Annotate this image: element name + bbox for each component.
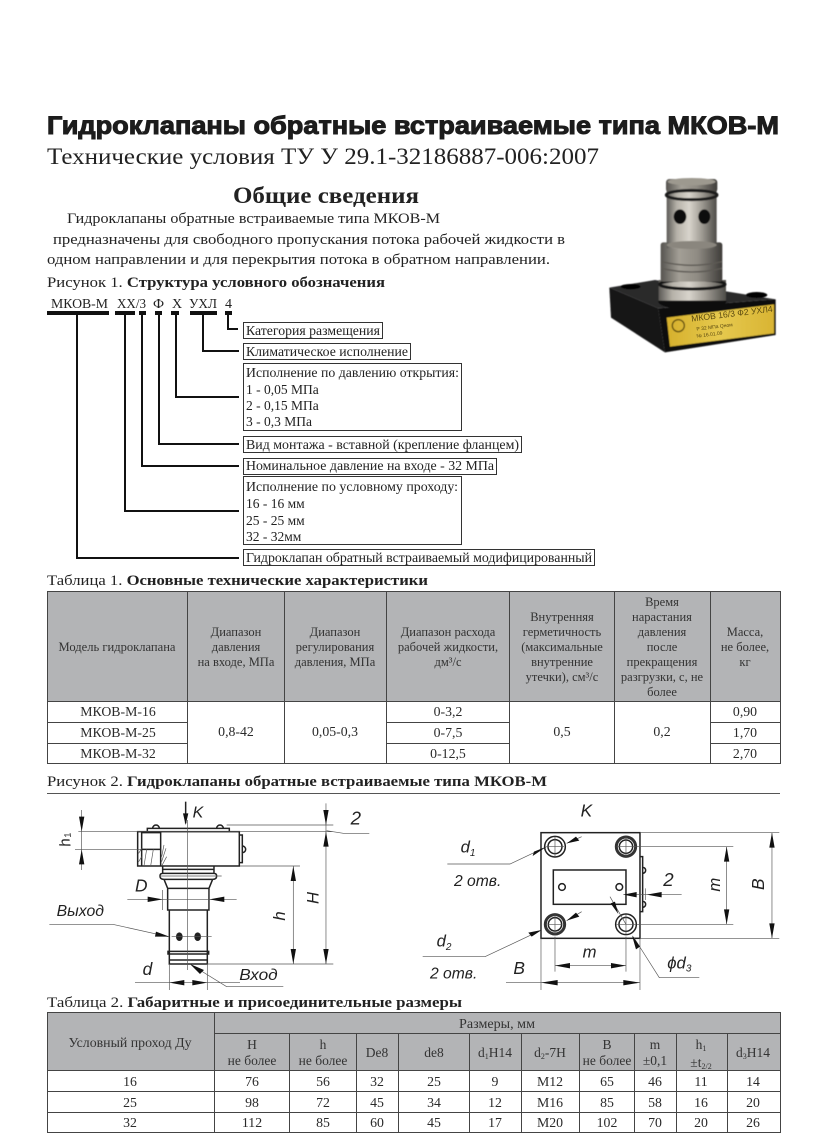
table 1 header text: утечки), см³/с (526, 670, 599, 684)
table 2 header text: Размеры, мм (459, 1016, 535, 1031)
table 1 values (80, 704, 757, 761)
table 1: main specifications (47, 591, 780, 764)
table 1 caption: Таблица 1. Основные технические характеристики (47, 573, 428, 589)
table 2 header text: Условный проход Ду (68, 1035, 192, 1050)
callout: nominal bore: 32 - 32мм (246, 529, 302, 544)
table 2 header text: 1 (485, 1052, 489, 1061)
table 2 row 32: 102 (597, 1115, 617, 1130)
drawing labels: h (56, 837, 75, 848)
drawing labels: H (303, 891, 322, 904)
table 1 header text: после (647, 640, 678, 654)
table 2 row 32: 45 (427, 1115, 441, 1130)
table 1 header text: нарастания (632, 610, 692, 624)
figure 1 caption: Рисунок 1. Структура условного обозначения (47, 275, 385, 291)
callout: nominal bore: 16 - 16 мм (246, 496, 305, 511)
table 2 row 16: 65 (600, 1074, 614, 1089)
drawing labels: ϕd (667, 953, 686, 972)
drawing labels: D (135, 876, 148, 896)
callout: opening pressure: 1 - 0,05 МПа (246, 382, 319, 397)
table 1 header text: Диапазон расхода (401, 625, 496, 639)
table 2 header text: 2 (541, 1052, 545, 1061)
drawing labels: K (193, 804, 205, 821)
subtitle: Технические условия ТУ У 29.1-32186887-006:2007 (47, 144, 599, 169)
table 1 header text: давления (638, 625, 687, 639)
table 2: dimensions (47, 1012, 780, 1132)
table 1 header text (58, 595, 769, 699)
designation code: ХХ/3 (117, 297, 146, 312)
product photo (609, 178, 776, 352)
table 2 header text: B (602, 1037, 612, 1052)
drawing labels: d (143, 959, 154, 979)
figure 2 caption: Рисунок 2. Гидроклапаны обратные встраиваемые типа МКОВ-М (47, 774, 547, 790)
table 1 values: 0-7,5 (434, 725, 462, 740)
table 2 row 32: 17 (488, 1115, 502, 1130)
table 1 values: МКОВ-М-16 (80, 704, 156, 719)
table 1 values: 1,70 (733, 725, 757, 740)
table 2 header text: -7H (545, 1045, 566, 1060)
drawing labels: B (513, 958, 525, 978)
table 1 header text: внутренние (531, 655, 593, 669)
table 1 header text: Масса, (727, 625, 763, 639)
callout: placement category: Категория размещения (246, 323, 380, 338)
table 2 row 25: 34 (427, 1095, 441, 1110)
flange and holes (541, 833, 646, 938)
table 1 values: 0,05-0,3 (312, 724, 358, 739)
table 2 header text: de8 (424, 1045, 444, 1060)
callout: nominal bore: 25 - 25 мм (246, 513, 305, 528)
table 2 row 25: 98 (245, 1095, 259, 1110)
callout: nominal bore (244, 476, 462, 544)
drawing labels: 1 (62, 832, 73, 839)
table 2 header text: h (696, 1037, 702, 1052)
table 1 header text: Диапазон (211, 625, 262, 639)
table 1 header text: Внутренняя (530, 610, 594, 624)
table 2 row 16: 14 (746, 1074, 760, 1089)
table 2 row 25: М16 (537, 1095, 563, 1110)
designation code: МКОВ-М (51, 297, 109, 312)
callout: mounting type: Вид монтажа - вставной (крепление фланцем) (246, 437, 519, 452)
table 2 header text: не более (299, 1053, 347, 1068)
table 2 header text: ±t (690, 1055, 701, 1070)
table 1 grid (48, 592, 780, 764)
table 2 header text: 2/2 (701, 1062, 712, 1071)
table 2 row 16 (123, 1074, 760, 1089)
table 2 row 16: 32 (370, 1074, 384, 1089)
table 1 header text: не более, (721, 640, 769, 654)
drawing labels: 1 (470, 848, 475, 859)
table 1 header text: давления, МПа (295, 655, 376, 669)
table 2 row 32: М20 (537, 1115, 563, 1130)
dimensions (423, 833, 779, 990)
text block: description: Гидроклапаны обратные встраиваемые типа МКОВ-М (67, 211, 440, 227)
table 1 header text: прекращения (627, 655, 698, 669)
table 2 header text: ±0,1 (643, 1053, 667, 1068)
table 2 row 16: 9 (492, 1074, 499, 1089)
drawing labels: m (705, 878, 724, 892)
table 2 row 16: М12 (537, 1074, 563, 1089)
code underline bars (47, 311, 232, 315)
drawing labels: B (748, 878, 768, 890)
drawing labels: 2 (445, 942, 452, 953)
table 1 header text: разгрузки, с, не (621, 670, 704, 684)
table 1 values: МКОВ-М-32 (80, 746, 156, 761)
drawing labels: 2 (662, 869, 674, 890)
table 1 header text: более (647, 685, 677, 699)
callout: nominal bore: Исполнение по условному проходу: (246, 479, 458, 494)
drawing labels: 2 (350, 808, 362, 829)
table 1 header background (47, 591, 780, 701)
table 1 values: 0,8-42 (218, 724, 254, 739)
table 2 header text: H14 (489, 1045, 512, 1060)
designation code: 4 (225, 297, 232, 312)
table 1 values: 0,2 (653, 724, 671, 739)
table 2 header text: De8 (366, 1045, 388, 1060)
valve body (138, 825, 246, 964)
drawing labels (429, 801, 768, 982)
table 1 header text: давления (212, 640, 261, 654)
table 2 header text: d (736, 1045, 743, 1060)
drawing labels: 3 (686, 964, 692, 975)
table 1 values: 0,5 (553, 724, 571, 739)
callout: opening pressure: Исполнение по давлению открытия: (246, 365, 459, 380)
product photo: Р 32 МПа Qном (696, 322, 734, 333)
table 2 row 32: 26 (746, 1115, 760, 1130)
drawing: side view (49, 802, 369, 990)
table 2 header text (68, 1016, 770, 1071)
table 2 row 25: 85 (600, 1095, 614, 1110)
table 1 values: 2,70 (733, 746, 757, 761)
drawing labels (55, 804, 362, 984)
table 2 row 16: 16 (123, 1074, 137, 1089)
drawing labels: h (270, 911, 289, 921)
table 2 row 32: 112 (242, 1115, 262, 1130)
table 1 header text: регулирования (296, 640, 374, 654)
table 2 row 16: 11 (694, 1074, 708, 1089)
table 1 values: 0-3,2 (434, 704, 462, 719)
centre line and dimensions (49, 802, 369, 990)
callout: opening pressure: 2 - 0,15 МПа (246, 398, 319, 413)
table 1 header text: дм³/с (434, 655, 462, 669)
drawing labels: Выход (57, 903, 104, 920)
table 2 row 25: 12 (488, 1095, 502, 1110)
drawing: top view (423, 801, 779, 990)
drawing labels: d (437, 932, 446, 951)
table 2 row 25: 20 (746, 1095, 760, 1110)
product photo: № 16.01.09 (696, 330, 723, 340)
table 1 values: 0-12,5 (430, 746, 466, 761)
leader lines (77, 313, 239, 558)
drawing labels: m (583, 943, 597, 962)
callout: nominal pressure: Номинальное давление на входе - 32 МПа (246, 458, 494, 473)
table 2 row 25: 72 (316, 1095, 330, 1110)
table 1 header text: Время (645, 595, 679, 609)
heading: general information: Общие сведения (233, 183, 419, 208)
table 2 row 16: 56 (316, 1074, 330, 1089)
table 2 header text: d (534, 1045, 541, 1060)
table 2 grid (48, 1012, 780, 1132)
table 2 row 32 (123, 1115, 760, 1130)
drawing labels: K (581, 801, 594, 821)
drawing labels: 2 отв. (429, 965, 477, 982)
table 2 header text: не более (583, 1053, 631, 1068)
table 2 header text: 1 (702, 1044, 706, 1053)
table 2 row 32: 70 (648, 1115, 662, 1130)
table 2 header text: m (650, 1037, 661, 1052)
table 2 row 25: 58 (648, 1095, 662, 1110)
table 2 header text: 3 (743, 1052, 747, 1061)
table 2 row 25: 16 (694, 1095, 708, 1110)
table 2 header text: H14 (747, 1045, 770, 1060)
callout: climate: Климатическое исполнение (246, 344, 408, 359)
callout: valve type: Гидроклапан обратный встраиваемый модифицированный (246, 550, 592, 565)
designation code: Х (172, 297, 182, 312)
table 2 row 16: 25 (427, 1074, 441, 1089)
table 2 row 32: 20 (694, 1115, 708, 1130)
designation code: УХЛ (189, 297, 217, 312)
table 2 header text: d (478, 1045, 485, 1060)
table 2 caption: Таблица 2. Габаритные и присоединительные размеры (47, 995, 462, 1011)
designation code: Ф (153, 297, 164, 312)
table 2 header text: не более (228, 1053, 276, 1068)
table 2 header text: H (247, 1037, 257, 1052)
table 2 row 32: 60 (370, 1115, 384, 1130)
table 2 header background (47, 1012, 780, 1071)
table 2 row 16: 76 (245, 1074, 259, 1089)
text block: description (47, 211, 565, 268)
title: Гидроклапаны обратные встраиваемые типа МКОВ-М (47, 112, 779, 140)
table 1 header text: кг (739, 655, 751, 669)
table 2 row 32: 85 (316, 1115, 330, 1130)
callout: opening pressure: 3 - 0,3 МПа (246, 414, 312, 429)
callout: opening pressure (244, 364, 462, 430)
table 1 header text: Модель гидроклапана (58, 640, 176, 654)
table 1 header text: на входе, МПа (198, 655, 275, 669)
table 2 row 25 (123, 1095, 760, 1110)
table 2 header text: h (320, 1037, 327, 1052)
table 2 row 25: 45 (370, 1095, 384, 1110)
text block: description: одном направлении и для перекрытия потока в обратном направлении. (47, 252, 550, 268)
table 2 row 32: 32 (123, 1115, 137, 1130)
table 1 header text: рабочей жидкости, (398, 640, 498, 654)
designation code (51, 297, 232, 312)
drawing labels: d (461, 838, 470, 857)
drawing labels: Вход (239, 967, 278, 984)
table 1 values: МКОВ-М-25 (80, 725, 156, 740)
table 2 row 16: 46 (648, 1074, 662, 1089)
table 1 header text: Диапазон (310, 625, 361, 639)
drawing labels: 2 отв. (453, 873, 501, 890)
product photo: МКОВ 16/3 Ф2 УХЛ4 (691, 304, 773, 324)
table 2 row 25: 25 (123, 1095, 137, 1110)
designation structure diagram (47, 297, 594, 566)
text block: description: предназначены для свободного пропускания потока рабочей жидкости в (53, 232, 565, 248)
table 1 values: 0,90 (733, 704, 757, 719)
table 1 header text: герметичность (523, 625, 602, 639)
table 1 header text: (максимальные (521, 640, 603, 654)
